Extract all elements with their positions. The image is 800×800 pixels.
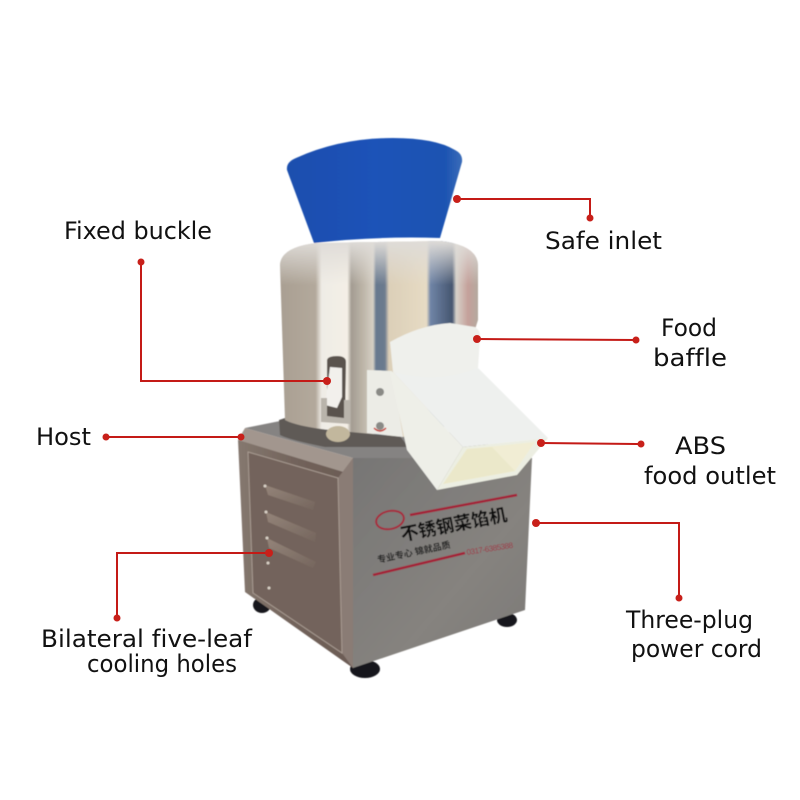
callout: host [36, 423, 244, 451]
callout: three-plug power cord: power cord [631, 635, 762, 663]
cooling louvers [265, 485, 316, 568]
callout: fixed buckle: Fixed buckle [64, 217, 212, 245]
callout: bilateral five-leaf cooling holes: Bilateral five-leaf [41, 625, 253, 653]
callout: bilateral five-leaf cooling holes [41, 549, 273, 678]
callout: ABS food outlet [537, 432, 776, 490]
callout: safe inlet [453, 195, 662, 255]
stainless steel cylinder [280, 241, 478, 440]
callout: food baffle: Food [661, 314, 717, 342]
callout: three-plug power cord [532, 519, 762, 663]
callout: food baffle [473, 314, 727, 372]
callout: safe inlet: Safe inlet [545, 227, 662, 255]
brand label: 不锈钢菜馅机 [399, 505, 509, 545]
machine feet [253, 597, 517, 678]
callout: ABS food outlet: food outlet [644, 462, 776, 490]
callout: three-plug power cord: Three-plug [625, 606, 753, 634]
machine base [238, 420, 532, 668]
product photo: food chopper machine [238, 138, 548, 678]
callout: food baffle: baffle [653, 344, 727, 372]
brand label: 专业专心 锦就品质 [376, 539, 451, 565]
brand label [373, 495, 517, 575]
callout: ABS food outlet: ABS [675, 432, 726, 460]
brand label: 0317-6385388 [466, 541, 514, 557]
callout: fixed buckle [64, 217, 331, 385]
callout: host: Host [36, 423, 91, 451]
latch buckle [321, 356, 350, 442]
callout: bilateral five-leaf cooling holes: cooling holes [87, 650, 237, 678]
ABS food outlet chute [390, 368, 548, 490]
side cooling panel [248, 452, 342, 653]
steel collar ring [279, 418, 408, 447]
blue funnel hopper [287, 138, 462, 243]
white food baffle [390, 323, 480, 379]
white bracket plate [367, 370, 403, 437]
cylinder rim highlight [280, 241, 478, 285]
